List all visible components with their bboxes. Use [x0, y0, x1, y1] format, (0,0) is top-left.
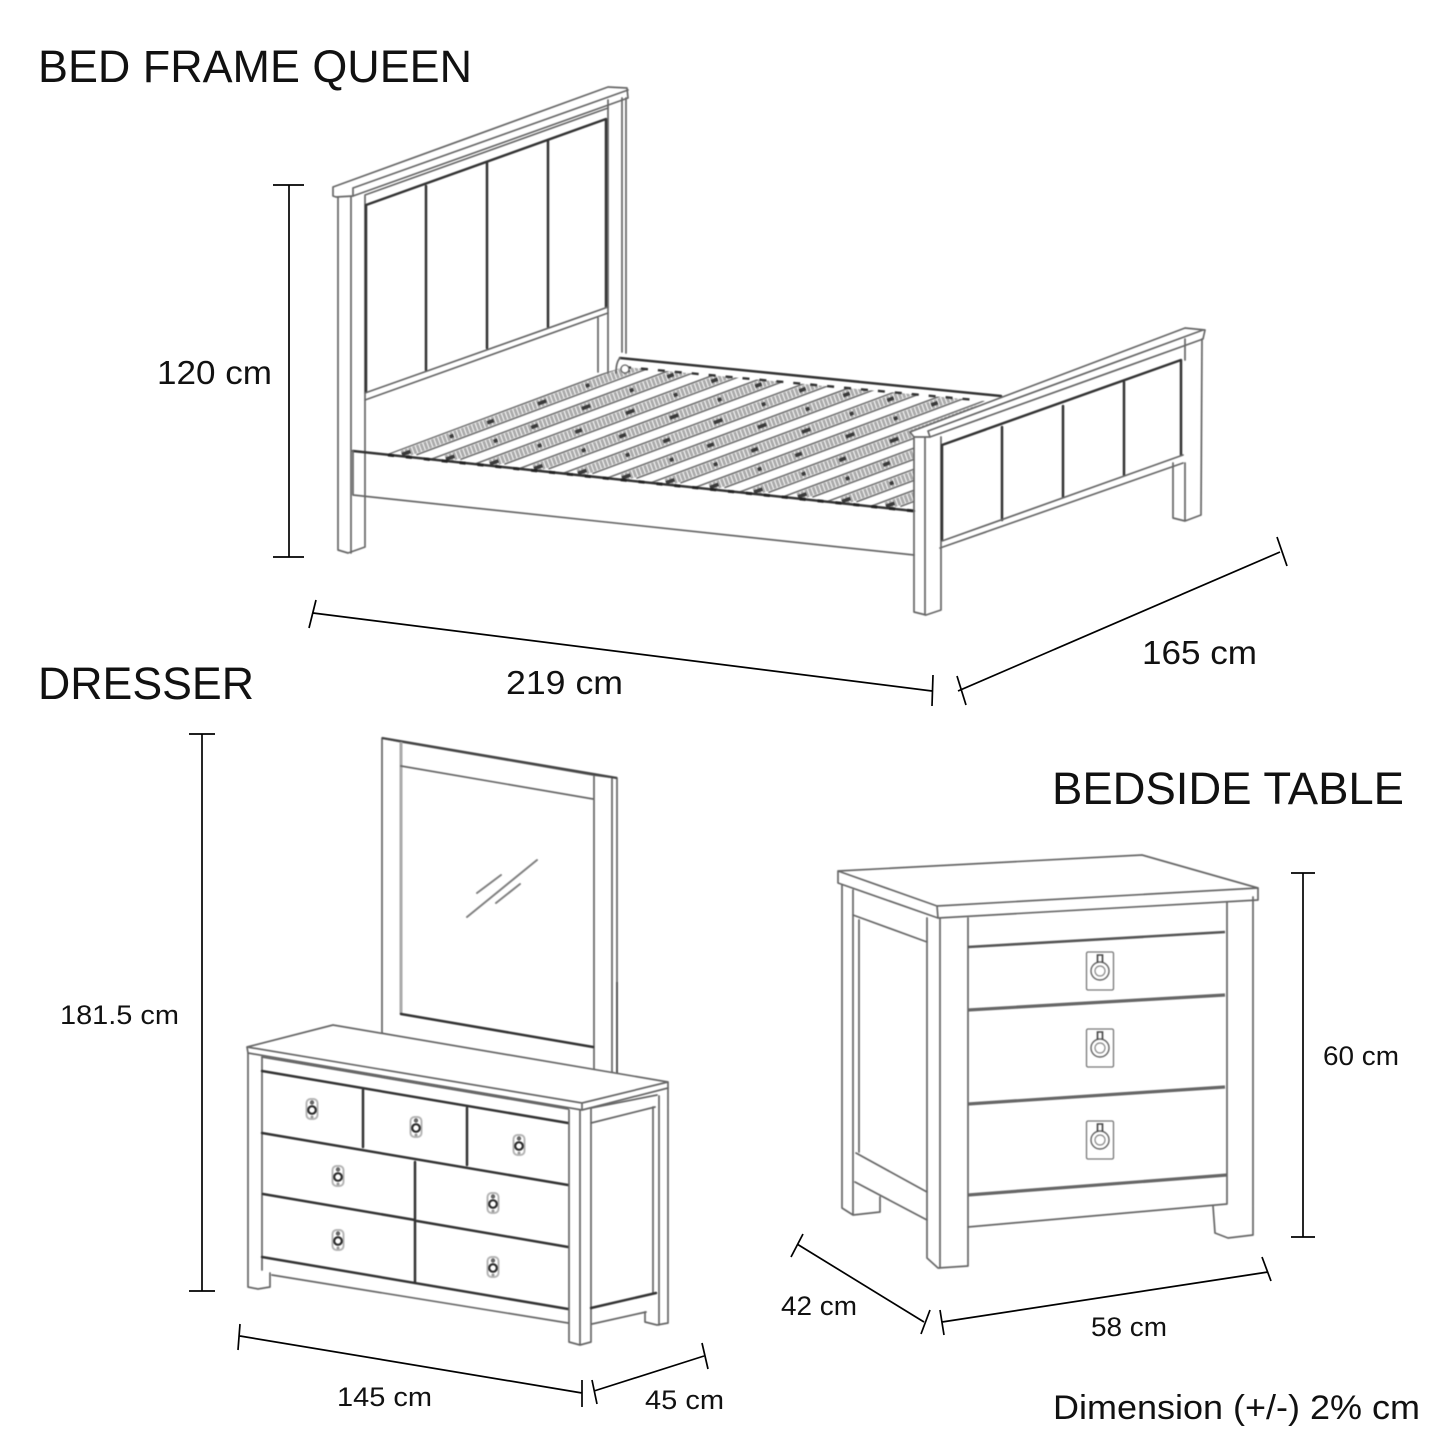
mirror — [382, 738, 617, 1074]
mirror glare — [467, 860, 537, 917]
dimension: width 165 cm — [957, 537, 1287, 705]
headboard — [333, 87, 628, 553]
dimension: height 181.5 cm: 181.5 cm — [60, 1000, 179, 1030]
drawing: bed frame — [333, 87, 1301, 615]
bed slats — [388, 367, 985, 508]
dimension: length 145 cm — [238, 1324, 582, 1412]
panel: dresser — [38, 658, 724, 1415]
drawer handles — [1086, 952, 1114, 1159]
dimension: width 58 cm: 58 cm — [1091, 1312, 1167, 1342]
title: bedside table: BEDSIDE TABLE — [1052, 763, 1404, 814]
dimension: height 60 cm — [1291, 873, 1399, 1237]
panel: bedside table — [781, 763, 1404, 1342]
dimension: width 58 cm — [940, 1257, 1271, 1342]
drawer handles — [306, 1099, 524, 1277]
footboard — [910, 328, 1205, 615]
bedside table body — [838, 855, 1258, 1268]
dimension: length 145 cm: 145 cm — [337, 1382, 432, 1412]
dresser body — [247, 1025, 668, 1345]
dimension: depth 42 cm — [781, 1234, 930, 1334]
side rails — [353, 358, 1001, 555]
dimension: length 219 cm — [309, 600, 933, 706]
panel: bed frame queen — [38, 41, 1301, 706]
dimension: length 219 cm: 219 cm — [506, 664, 623, 701]
footnote: dimension tolerance: Dimension (+/-) 2% cm — [1053, 1389, 1420, 1427]
title: dresser: DRESSER — [38, 658, 254, 709]
dimension: height 181.5 cm — [60, 734, 215, 1291]
dimension: height 60 cm: 60 cm — [1323, 1041, 1399, 1071]
dimension: width 165 cm: 165 cm — [1142, 634, 1257, 671]
title: bed frame queen: BED FRAME QUEEN — [38, 41, 472, 92]
dimension: height 120 cm — [157, 185, 304, 557]
dimension: depth 45 cm — [592, 1343, 724, 1415]
dimension: depth 45 cm: 45 cm — [645, 1385, 724, 1415]
dimension: depth 42 cm: 42 cm — [781, 1291, 857, 1321]
dimension: height 120 cm: 120 cm — [157, 354, 272, 391]
